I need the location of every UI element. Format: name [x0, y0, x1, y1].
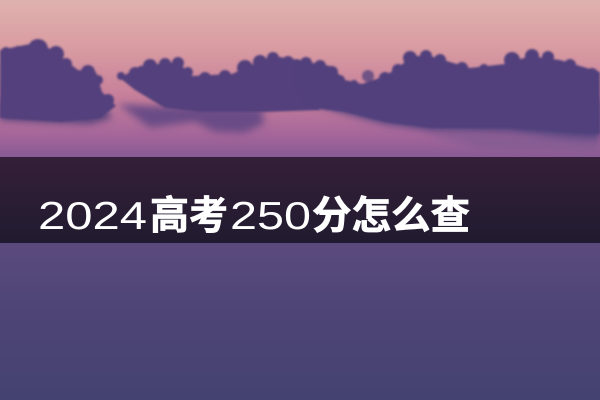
title: 250: [230, 195, 311, 238]
sunset sky background: [0, 0, 600, 158]
cloud: left: [0, 39, 116, 122]
lower purple area: [0, 243, 600, 400]
cloud: right bank: [296, 49, 600, 134]
soft cloud bases and mist: [0, 100, 600, 150]
title: 2024: [38, 195, 147, 238]
title: 分怎么查: [312, 195, 470, 238]
dark title band: [0, 157, 600, 243]
title: [38, 195, 470, 238]
title: 高考: [150, 195, 228, 238]
cloud: centre bank: [117, 52, 320, 112]
